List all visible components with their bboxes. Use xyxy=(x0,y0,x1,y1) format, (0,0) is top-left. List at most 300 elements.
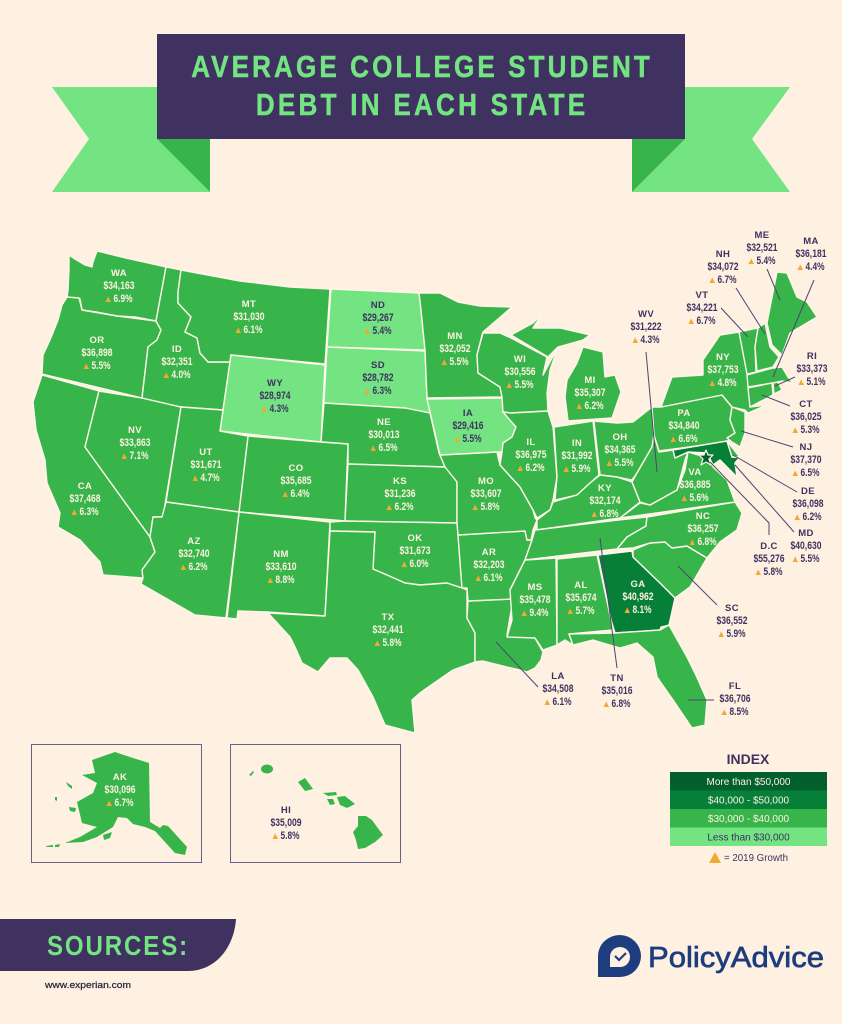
label: NV: NV xyxy=(128,425,142,436)
label: VT: 6.7% xyxy=(696,315,716,327)
label: CA: $37,468 xyxy=(70,493,100,505)
state: MI upper xyxy=(511,314,590,357)
label: WA: WA xyxy=(111,268,127,279)
state: MO xyxy=(440,452,537,540)
label: TX: $32,441 xyxy=(372,624,404,636)
logo icon xyxy=(598,935,641,977)
label: NH xyxy=(708,249,738,286)
state: CO xyxy=(239,436,348,521)
label: NJ: 6.5% xyxy=(800,467,820,479)
label: WV xyxy=(630,309,662,346)
label: TX xyxy=(372,612,404,649)
label: MT: MT xyxy=(242,299,256,310)
title banner xyxy=(52,34,790,192)
label: OR: $36,898 xyxy=(82,347,112,359)
label: TN: $35,016 xyxy=(602,685,632,697)
label: WY: WY xyxy=(267,378,283,389)
label: MD: $40,630 xyxy=(790,540,822,552)
label: DC: $55,276 xyxy=(754,553,784,565)
state: SC xyxy=(633,542,707,598)
label: AR: $32,203 xyxy=(474,559,504,571)
label: ND: 5.4% xyxy=(372,325,392,337)
label: AL xyxy=(566,580,597,617)
label: NE: $30,013 xyxy=(368,429,400,441)
label: MD: MD xyxy=(798,528,814,539)
leader: MA xyxy=(773,280,814,377)
label: MS: 9.4% xyxy=(530,607,549,619)
label: MD xyxy=(790,528,822,565)
state: WA xyxy=(67,251,166,321)
label: MS: MS xyxy=(527,582,543,593)
label: ME: 5.4% xyxy=(756,255,776,267)
label: TX: TX xyxy=(382,612,395,623)
logo: PolicyAdvice xyxy=(598,935,824,977)
label: HI: 5.8% xyxy=(280,830,300,842)
label: CA: CA xyxy=(78,481,92,492)
label: AL: AL xyxy=(574,580,588,591)
label: ID: $32,351 xyxy=(162,356,192,368)
label: DC xyxy=(754,541,784,578)
label: AZ xyxy=(178,536,210,573)
label: NV: 7.1% xyxy=(130,450,149,462)
panel: Hawaii inset xyxy=(230,744,400,862)
state: KS xyxy=(345,464,457,523)
state: NC xyxy=(617,502,742,558)
state: AZ xyxy=(141,502,239,618)
label: CA xyxy=(70,481,100,518)
leader: VT xyxy=(721,308,748,337)
state labels xyxy=(70,230,828,718)
left ribbon tail xyxy=(52,87,210,192)
label: OH: $34,365 xyxy=(604,444,636,456)
Hawaii frame xyxy=(230,744,400,862)
label: VA xyxy=(680,467,710,504)
leader lines xyxy=(496,269,814,700)
label: WI: WI xyxy=(514,354,526,365)
label: IA xyxy=(452,408,484,445)
state: LA xyxy=(467,599,543,672)
label: LA: 6.1% xyxy=(552,696,572,708)
label: SD xyxy=(362,360,394,397)
label: KY xyxy=(590,483,621,520)
label: AK: 6.7% xyxy=(114,797,134,809)
label: IL xyxy=(516,437,546,474)
label: OK: $31,673 xyxy=(400,545,430,557)
state: AR xyxy=(458,531,532,601)
banner panel xyxy=(157,34,685,139)
state: PA xyxy=(652,395,735,451)
state: MS xyxy=(507,558,557,650)
label: VA: $36,885 xyxy=(680,479,710,491)
label: FL: FL xyxy=(729,681,741,692)
label: IA: $29,416 xyxy=(452,420,484,432)
label: AR xyxy=(474,547,504,584)
label: MO: 5.8% xyxy=(480,501,500,513)
state: CT xyxy=(748,383,773,407)
state: ND xyxy=(327,289,425,350)
label: ID: 4.0% xyxy=(172,369,191,381)
label: DE xyxy=(792,486,824,523)
label: FL: $36,706 xyxy=(720,693,750,705)
leader: CT xyxy=(762,395,790,406)
label: MA: 4.4% xyxy=(806,261,825,273)
label: GA: $40,962 xyxy=(622,591,654,603)
state: WI xyxy=(477,333,558,413)
label: NC: $36,257 xyxy=(688,523,718,535)
label: FL xyxy=(720,681,750,718)
legend: index xyxy=(670,751,827,864)
label: ME: $32,521 xyxy=(746,242,778,254)
leader: RI xyxy=(775,377,795,386)
label: NM: NM xyxy=(273,549,289,560)
label: WY xyxy=(260,378,291,415)
sources banner xyxy=(0,919,236,971)
leader: ME xyxy=(767,269,780,300)
label: SD: $28,782 xyxy=(362,372,394,384)
label: NY xyxy=(708,352,738,389)
label: HI xyxy=(270,805,302,842)
state: OK xyxy=(330,521,462,588)
label: DE: DE xyxy=(801,486,815,497)
state: NE xyxy=(321,403,445,467)
state: NM xyxy=(227,512,330,619)
state: DE xyxy=(727,441,740,457)
label: PA xyxy=(668,408,700,445)
label: MI xyxy=(574,375,606,412)
label: WV: $31,222 xyxy=(630,321,662,333)
state: MN xyxy=(419,293,512,398)
state: OH xyxy=(594,407,654,480)
label: NM xyxy=(266,549,296,586)
label: TN: TN xyxy=(610,673,624,684)
label: RI: $33,373 xyxy=(796,363,828,375)
label: KS xyxy=(384,476,416,513)
title line 1: AVERAGE COLLEGE STUDENT xyxy=(191,50,650,85)
state: VA xyxy=(620,452,735,518)
state: MA xyxy=(747,367,793,387)
legend row: more than 50000: More than $50,000 xyxy=(707,777,791,788)
state: MD xyxy=(673,441,740,477)
label: NE: 6.5% xyxy=(378,442,398,454)
label: PA: PA xyxy=(677,408,691,419)
label: ME: ME xyxy=(754,230,770,241)
legend row: less than 30000: Less than $30,000 xyxy=(707,832,790,844)
label: NY: NY xyxy=(716,352,730,363)
label: ND xyxy=(362,300,394,337)
label: IA: IA xyxy=(463,408,473,419)
title line 2: DEBT IN EACH STATE xyxy=(256,88,585,123)
legend title: INDEX xyxy=(727,751,770,767)
label: WA: $34,163 xyxy=(104,280,134,292)
leader: WV xyxy=(646,352,657,472)
label: WY: 4.3% xyxy=(270,403,289,415)
label: IN: 5.9% xyxy=(572,463,591,475)
label: OH: 5.5% xyxy=(614,457,634,469)
label: WI: $30,556 xyxy=(504,366,536,378)
label: MI: MI xyxy=(584,375,596,386)
label: NC: 6.8% xyxy=(698,536,717,548)
label: OK: OK xyxy=(407,533,423,544)
label: MA: $36,181 xyxy=(796,248,826,260)
label: IN xyxy=(562,438,592,475)
sources heading: SOURCES: xyxy=(47,929,187,961)
state: DC star xyxy=(699,450,713,465)
label: PA: 6.6% xyxy=(678,433,698,445)
leader: NH xyxy=(736,288,765,334)
state: FL xyxy=(569,625,707,728)
label: SC: $36,552 xyxy=(716,615,748,627)
label: NH: NH xyxy=(716,249,730,260)
leader: DE xyxy=(733,455,797,492)
label: KY: KY xyxy=(598,483,612,494)
leader: LA xyxy=(496,642,538,687)
label: SC: 5.9% xyxy=(726,628,746,640)
state: VT xyxy=(739,328,758,374)
label: VA: 5.6% xyxy=(690,492,709,504)
label: WY: $28,974 xyxy=(260,390,291,402)
label: WV: WV xyxy=(638,309,654,320)
state: UT xyxy=(166,407,248,512)
label: CO: $35,685 xyxy=(280,475,312,487)
Hawaii islands xyxy=(249,764,383,849)
label: OR: 5.5% xyxy=(92,360,111,372)
label: MO xyxy=(470,476,502,513)
label: NH: 6.7% xyxy=(718,274,737,286)
state: NH xyxy=(755,323,779,371)
state: IA xyxy=(427,398,516,455)
left ribbon fold xyxy=(157,139,210,192)
label: ND: $29,267 xyxy=(362,312,394,324)
label: PA: $34,840 xyxy=(668,420,700,432)
label: OR: OR xyxy=(89,335,105,346)
Alaska frame xyxy=(32,744,202,862)
label: IA: 5.5% xyxy=(462,433,482,445)
label: NY: $37,753 xyxy=(708,364,738,376)
label: OH xyxy=(604,432,636,469)
label: AK xyxy=(104,772,136,809)
label: CT: $36,025 xyxy=(790,411,822,423)
label: VA: VA xyxy=(688,467,702,478)
label: LA xyxy=(542,671,574,708)
label: MT: 6.1% xyxy=(244,324,263,336)
label: IN: IN xyxy=(572,438,582,449)
legend row: less than 30000 xyxy=(670,828,827,846)
state: IL xyxy=(500,411,557,518)
label: AK: AK xyxy=(113,772,127,783)
label: NJ: $37,370 xyxy=(790,454,822,466)
label: MN: 5.5% xyxy=(450,356,469,368)
label: KY: 6.8% xyxy=(600,508,619,520)
label: GA xyxy=(622,579,654,616)
label: NJ: NJ xyxy=(800,442,812,453)
label: RI xyxy=(796,351,828,388)
state: MI lower xyxy=(565,347,621,421)
state: WV xyxy=(632,435,688,505)
label: WI: 5.5% xyxy=(514,379,534,391)
label: CO: 6.4% xyxy=(290,488,310,500)
label: SC: SC xyxy=(725,603,739,614)
label: SC xyxy=(716,603,748,640)
state: TX xyxy=(268,531,475,733)
leader: SC xyxy=(678,566,717,605)
label: AZ: 6.2% xyxy=(188,561,208,573)
label: MO: $33,607 xyxy=(470,488,502,500)
label: NY: 4.8% xyxy=(718,377,737,389)
label: KY: $32,174 xyxy=(590,495,621,507)
leader: FL xyxy=(688,699,714,701)
label: DC: D.C xyxy=(760,541,778,552)
label: NV xyxy=(120,425,150,462)
state: RI xyxy=(773,382,782,394)
label: OR xyxy=(82,335,112,372)
leader: NJ xyxy=(741,431,793,447)
state: OR xyxy=(42,297,161,398)
label: AZ: $32,740 xyxy=(178,548,210,560)
label: MN xyxy=(440,331,470,368)
label: MN: $32,052 xyxy=(440,343,470,355)
label: UT: UT xyxy=(199,447,213,458)
label: OK xyxy=(400,533,430,570)
state: KY xyxy=(537,475,640,530)
label: CT: 5.3% xyxy=(800,424,820,436)
label: MI: $35,307 xyxy=(574,387,606,399)
map: contiguous states xyxy=(33,251,817,733)
label: ID: ID xyxy=(172,344,182,355)
label: LA: LA xyxy=(551,671,565,682)
state: CA xyxy=(33,375,155,578)
label: ID xyxy=(162,344,192,381)
label: AL: 5.7% xyxy=(576,605,595,617)
state: GA xyxy=(598,551,675,633)
label: IL: $36,975 xyxy=(516,449,546,461)
label: MS: $35,478 xyxy=(520,594,550,606)
sources bar xyxy=(0,919,236,971)
label: TX: 5.8% xyxy=(382,637,402,649)
logo wordmark: PolicyAdvice xyxy=(648,942,824,974)
label: DE: $36,098 xyxy=(792,498,824,510)
leader: MD xyxy=(735,465,794,532)
label: UT: 4.7% xyxy=(200,472,220,484)
leader: TN xyxy=(600,538,617,668)
state: NV xyxy=(85,391,181,537)
state: TN xyxy=(525,517,647,560)
label: MD: 5.5% xyxy=(800,553,820,565)
label: WV: 4.3% xyxy=(640,334,660,346)
label: NV: $33,863 xyxy=(120,437,150,449)
leader: DC xyxy=(710,462,769,535)
legend row: 30000 to 40000: $30,000 - $40,000 xyxy=(708,814,790,825)
label: MA xyxy=(796,236,826,273)
label: WI xyxy=(504,354,536,391)
label: ME xyxy=(746,230,778,267)
label: LA: $34,508 xyxy=(542,683,574,695)
label: UT xyxy=(190,447,222,484)
label: AR: 6.1% xyxy=(484,572,503,584)
legend row: 40000 to 50000 xyxy=(670,790,827,809)
state: SD xyxy=(324,347,430,413)
label: DE: 6.2% xyxy=(802,511,822,523)
label: NE: NE xyxy=(377,417,391,428)
right ribbon tail xyxy=(632,87,790,192)
label: MI: 6.2% xyxy=(584,400,604,412)
label: OH: OH xyxy=(612,432,628,443)
label: TN xyxy=(602,673,632,710)
label: NE xyxy=(368,417,400,454)
label: RI: 5.1% xyxy=(806,376,826,388)
label: SD: SD xyxy=(371,360,385,371)
label: NM: $33,610 xyxy=(266,561,296,573)
label: DC: 5.8% xyxy=(764,566,783,578)
legend row: 30000 to 40000 xyxy=(670,809,827,828)
label: CO xyxy=(280,463,312,500)
legend row: more than 50000 xyxy=(670,772,827,790)
label: HI: HI xyxy=(281,805,291,816)
label: GA: GA xyxy=(630,579,646,590)
panel: Alaska inset xyxy=(32,744,202,862)
right ribbon fold xyxy=(632,139,685,192)
label: UT: $31,671 xyxy=(190,459,222,471)
label: KS: 6.2% xyxy=(394,501,414,513)
label: GA: 8.1% xyxy=(632,604,652,616)
label: HI: $35,009 xyxy=(270,817,302,829)
legend row: 40000 to 50000: $40,000 - $50,000 xyxy=(708,796,790,806)
label: MO: MO xyxy=(478,476,494,487)
label: TN: 6.8% xyxy=(612,698,631,710)
label: NM: 8.8% xyxy=(276,574,295,586)
label: SD: 6.3% xyxy=(372,385,392,397)
label: VT: $34,221 xyxy=(686,302,718,314)
state: NY xyxy=(661,332,767,413)
state: ID xyxy=(142,267,230,410)
label: AK: $30,096 xyxy=(104,784,136,796)
label: MA: MA xyxy=(803,236,819,247)
label: WA xyxy=(104,268,134,305)
label: MS xyxy=(520,582,550,619)
label: FL: 8.5% xyxy=(730,706,749,718)
label: CT: CT xyxy=(799,399,813,410)
label: IL: 6.2% xyxy=(526,462,545,474)
label: AR: AR xyxy=(482,547,496,558)
state: WY xyxy=(220,355,325,442)
label: NC xyxy=(688,511,718,548)
label: CT xyxy=(790,399,822,436)
label: VT: VT xyxy=(696,290,708,301)
label: CA: 6.3% xyxy=(80,506,99,518)
state: AL xyxy=(557,555,613,645)
label: NC: NC xyxy=(696,511,710,522)
state: ME xyxy=(767,272,817,355)
label: WA: 6.9% xyxy=(114,293,133,305)
label: ND: ND xyxy=(371,300,385,311)
label: MN: MN xyxy=(447,331,463,342)
label: IN: $31,992 xyxy=(562,450,592,462)
label: AL: $35,674 xyxy=(566,592,597,604)
label: AZ: AZ xyxy=(187,536,201,547)
label: MT: $31,030 xyxy=(234,311,264,323)
label: KS: $31,236 xyxy=(384,488,416,500)
Alaska shape xyxy=(46,752,187,855)
sources url: www.experian.com xyxy=(44,980,131,990)
state: MT xyxy=(178,270,330,364)
label: RI: RI xyxy=(807,351,817,362)
label: NH: $34,072 xyxy=(708,261,738,273)
label: CO: CO xyxy=(288,463,304,474)
label: MT xyxy=(234,299,264,336)
label: KS: KS xyxy=(393,476,407,487)
legend: growth marker: = 2019 Growth xyxy=(724,853,788,864)
label: NJ xyxy=(790,442,822,479)
label: OK: 6.0% xyxy=(410,558,429,570)
